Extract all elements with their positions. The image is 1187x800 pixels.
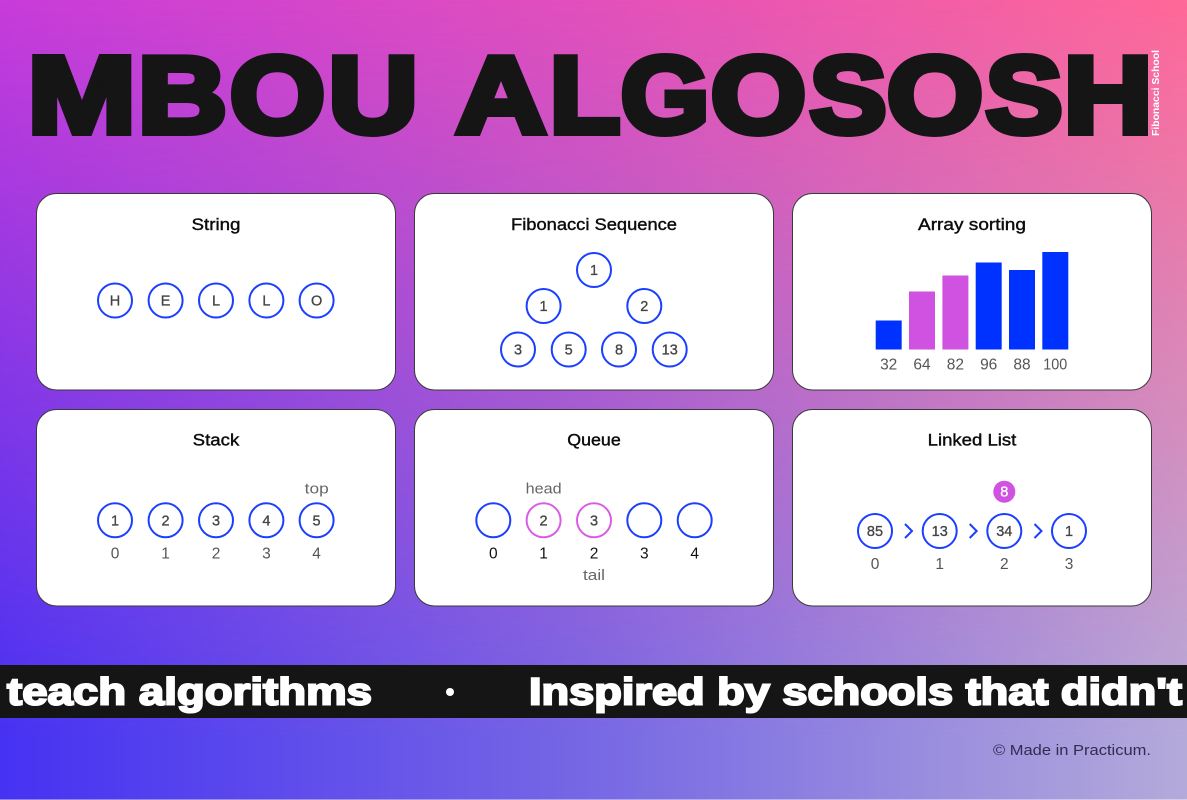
- heading: Stack: Stack: [193, 431, 240, 450]
- fibonacci tree nodes: [501, 253, 687, 366]
- linked list nodes: 1: [1065, 524, 1073, 540]
- heading: Queue: Queue: [567, 431, 621, 450]
- panel: Fibonacci Sequence: [414, 194, 774, 390]
- stack nodes: 2: [162, 513, 170, 529]
- panel: Queue: [414, 410, 774, 606]
- title: S: [810, 34, 886, 156]
- title: L: [550, 33, 620, 156]
- title: [28, 33, 1152, 156]
- bar chart: 64: [913, 356, 931, 374]
- heading: Array sorting: Array sorting: [918, 215, 1026, 234]
- stack nodes: 4: [262, 513, 270, 529]
- label: head: head: [526, 480, 562, 497]
- title: S: [986, 34, 1062, 156]
- queue indices: 4: [690, 545, 699, 562]
- stack indices: 0: [111, 545, 120, 562]
- ticker banner: teach algorithms: [7, 672, 372, 714]
- queue nodes: [476, 503, 712, 537]
- label: tail: tail: [583, 567, 605, 584]
- stack nodes: 1: [111, 513, 119, 529]
- title: O: [887, 33, 983, 156]
- linked list indices: 2: [1000, 556, 1009, 573]
- string nodes: [98, 284, 334, 318]
- bar chart: 96: [980, 356, 997, 374]
- arrows between nodes: [905, 524, 1042, 538]
- heading: Fibonacci Sequence: Fibonacci Sequence: [511, 215, 677, 234]
- linked list nodes: 85: [867, 524, 883, 540]
- title: B: [138, 34, 227, 156]
- fibonacci tree nodes: 8: [615, 342, 623, 358]
- title: M: [28, 34, 136, 156]
- queue indices: 2: [590, 545, 598, 562]
- string nodes: L: [212, 294, 220, 310]
- heading: String: String: [192, 215, 240, 234]
- badge: inserted value 8: 8: [1000, 485, 1008, 501]
- ticker banner: [0, 665, 1187, 718]
- stack indices: [111, 545, 321, 562]
- stack nodes: [98, 503, 334, 537]
- fibonacci tree nodes: 2: [640, 299, 648, 315]
- heading: Linked List: Linked List: [928, 431, 1017, 450]
- panel: Linked List: [792, 410, 1152, 606]
- separator dot: [446, 688, 454, 696]
- panel: Stack: [36, 410, 396, 606]
- stack nodes: 3: [212, 513, 220, 529]
- bar chart: 100: [1043, 356, 1068, 374]
- stack indices: 1: [161, 545, 170, 562]
- stack nodes: 5: [313, 513, 321, 529]
- label: top: top: [305, 480, 329, 497]
- linked list nodes: [858, 514, 1086, 548]
- badge: inserted value 8: [993, 481, 1015, 503]
- ticker banner: Inspired by schools that didn't: [529, 672, 1182, 714]
- fibonacci tree nodes: 5: [565, 342, 573, 358]
- title: H: [1064, 34, 1152, 156]
- queue nodes: 2: [540, 513, 548, 529]
- bar chart: 88: [1013, 356, 1031, 374]
- stack indices: 4: [312, 545, 321, 562]
- fibonacci tree nodes: 1: [540, 299, 548, 315]
- title: O: [711, 34, 806, 156]
- string nodes: E: [161, 294, 171, 310]
- footer credit: © Made in Practicum.: [993, 742, 1151, 759]
- queue indices: 0: [489, 545, 498, 562]
- title: A: [456, 34, 546, 156]
- queue nodes: 3: [590, 513, 598, 529]
- string nodes: H: [110, 294, 120, 310]
- bar chart: 82: [947, 356, 964, 374]
- bar chart: 32: [880, 356, 897, 374]
- fibonacci tree nodes: 3: [514, 342, 522, 358]
- vertical label: Fibonacci School: Fibonacci School: [1151, 50, 1162, 136]
- queue indices: 1: [539, 545, 548, 562]
- linked list indices: 3: [1065, 556, 1073, 573]
- stack indices: 3: [262, 545, 271, 562]
- bar chart: [876, 252, 1068, 374]
- fibonacci tree nodes: 13: [662, 342, 678, 358]
- queue indices: 3: [640, 545, 649, 562]
- title: G: [621, 34, 709, 156]
- title: O: [230, 34, 325, 156]
- string nodes: O: [311, 294, 322, 310]
- linked list indices: 1: [935, 556, 944, 573]
- title: U: [328, 33, 418, 156]
- panel: String: [36, 194, 396, 390]
- linked list nodes: 34: [996, 524, 1012, 540]
- stack indices: 2: [212, 545, 220, 562]
- linked list nodes: 13: [932, 524, 948, 540]
- fibonacci tree nodes: 1: [590, 263, 598, 279]
- queue indices: [489, 545, 699, 562]
- linked list indices: 0: [871, 556, 880, 573]
- linked list indices: [871, 556, 1073, 573]
- panel: Array sorting: [792, 194, 1152, 390]
- string nodes: L: [262, 294, 270, 310]
